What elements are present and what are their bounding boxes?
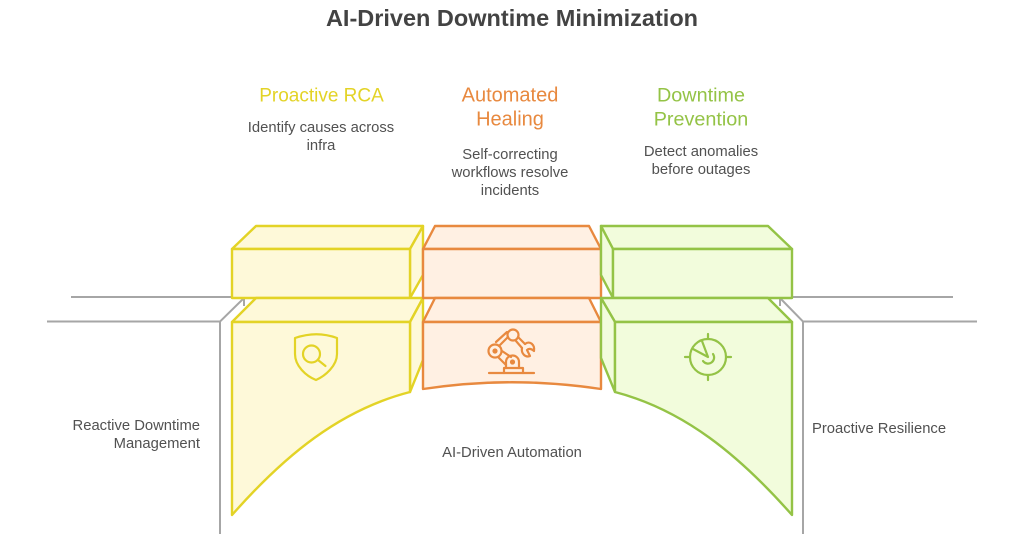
column heading: Automated Healing: Automated [462, 84, 558, 106]
lower green box [601, 298, 792, 515]
label: Reactive Downtime Management: Management [114, 436, 200, 452]
column heading: Proactive RCA: Proactive RCA [259, 86, 384, 106]
panel: yellow block [232, 226, 423, 515]
icon: robot arm [488, 330, 534, 373]
icon: shield with magnifier [295, 334, 337, 380]
lower orange box [423, 298, 601, 389]
description: Proactive RCA: Identify causes across [248, 120, 394, 136]
description: Automated Healing: Self-correcting [462, 147, 558, 163]
ground outline: right step [780, 297, 977, 534]
lower yellow box [232, 298, 423, 515]
column heading: Downtime Prevention: Prevention [654, 108, 748, 130]
column heading: Automated Healing: Healing [476, 108, 544, 130]
description: Downtime Prevention: Detect anomalies [644, 144, 758, 160]
panel: green block [601, 226, 792, 515]
upper orange box [423, 226, 601, 298]
upper green box [601, 226, 792, 298]
label: AI-Driven Automation: AI-Driven Automation [442, 445, 582, 461]
upper yellow box [232, 226, 423, 298]
panel: orange block [423, 226, 601, 389]
description: Downtime Prevention: before outages [652, 162, 750, 178]
description: Automated Healing: incidents [481, 183, 539, 199]
title: AI-Driven Downtime Minimization [326, 5, 698, 31]
icon: radar target [685, 334, 731, 380]
label: Reactive Downtime Management: Reactive Downtime [73, 418, 200, 434]
description: Proactive RCA: infra [307, 138, 336, 154]
description: Automated Healing: workflows resolve [451, 165, 568, 181]
column heading: Downtime Prevention: Downtime [657, 84, 745, 106]
ground outline: left step [47, 297, 244, 534]
label: Proactive Resilience: Proactive Resilience [812, 421, 946, 437]
